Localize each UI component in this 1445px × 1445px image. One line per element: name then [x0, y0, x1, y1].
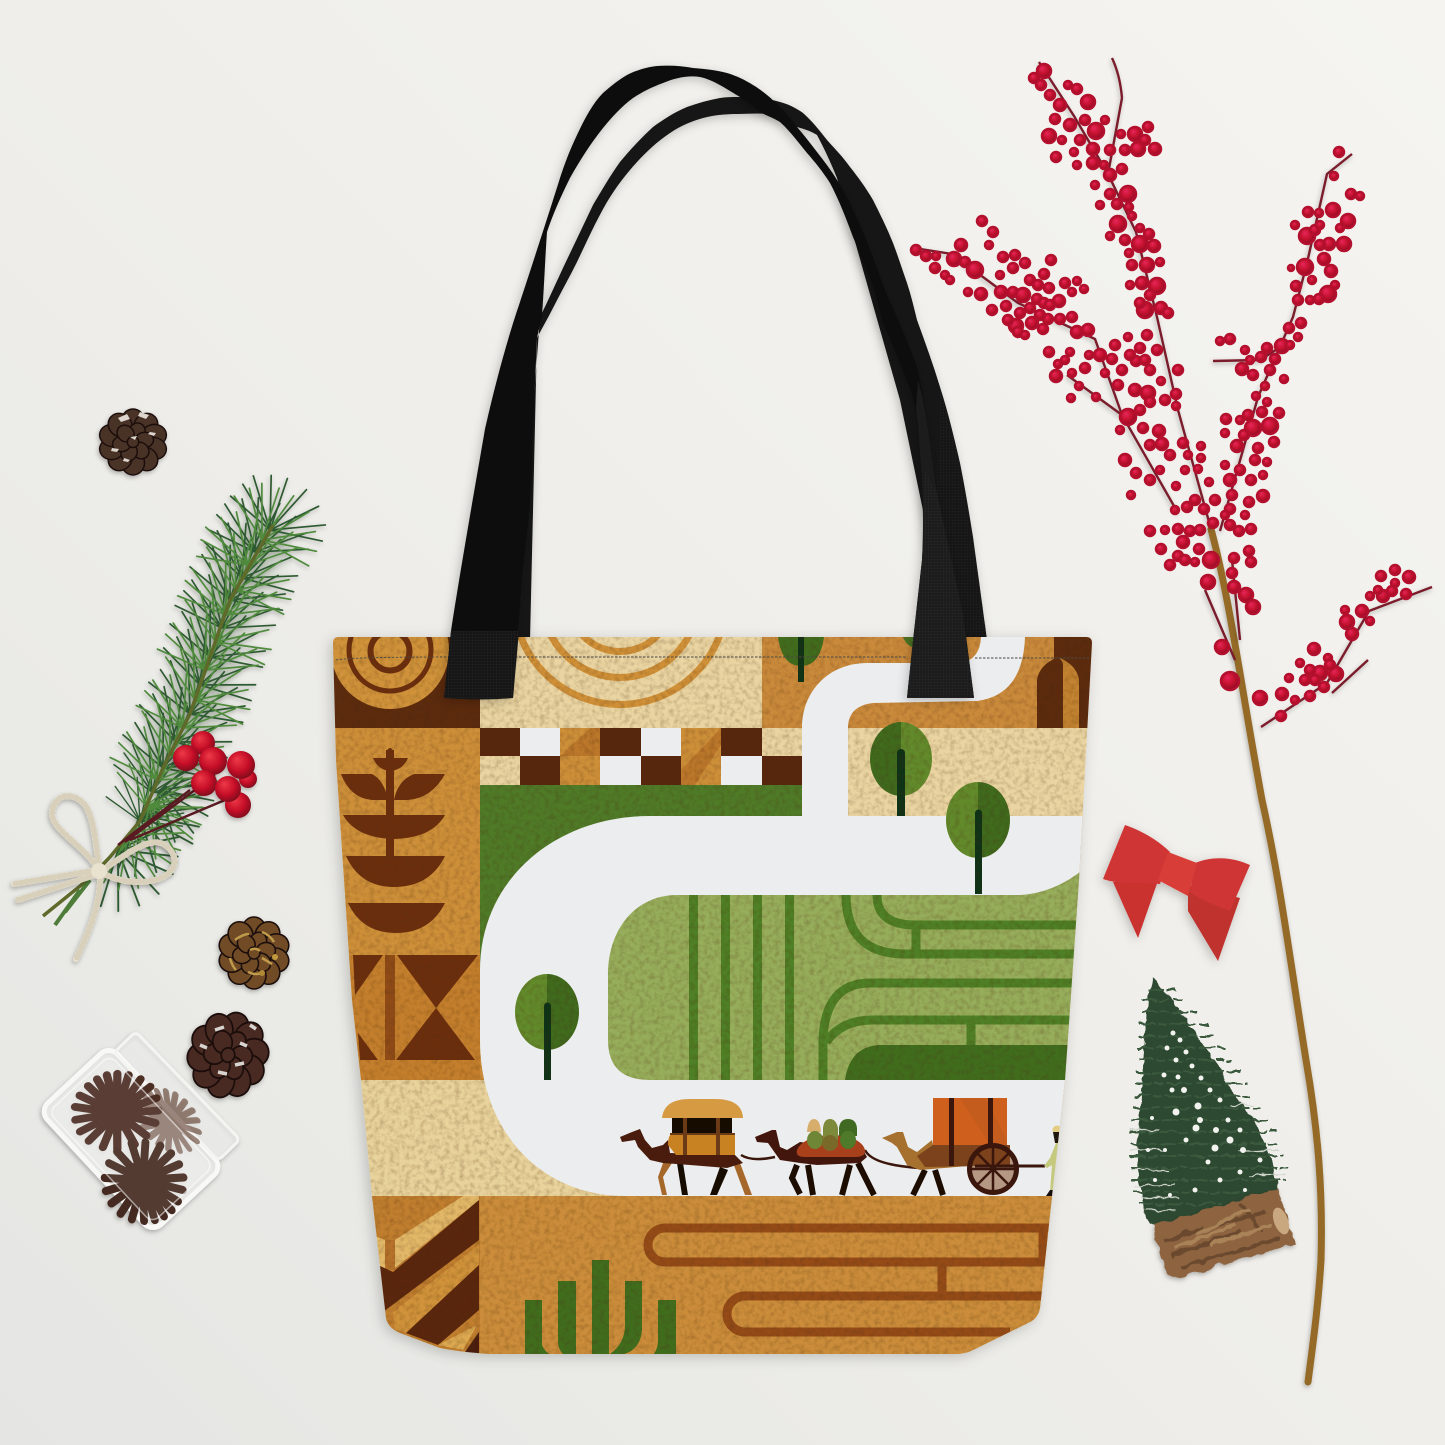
icon: tree 2 — [946, 782, 1010, 894]
snow flecks — [1146, 1030, 1262, 1197]
panel: cream block right — [848, 728, 1098, 816]
cart wheel — [970, 1146, 1016, 1192]
pine cone beside jar — [175, 1002, 281, 1108]
panel: triangle block — [349, 955, 480, 1080]
right strap lower section — [907, 380, 974, 698]
stitching — [336, 657, 1090, 660]
front strap — [444, 66, 987, 700]
berry cluster — [173, 731, 257, 818]
branch: red winterberry — [911, 58, 1432, 1382]
panel: checker strip — [480, 728, 802, 785]
pine density haze — [163, 545, 262, 768]
panel: light green field — [608, 868, 1085, 1080]
camel 2 — [755, 1119, 920, 1195]
pine sprig with berries and twine — [14, 460, 340, 959]
panel: coloured blocks — [324, 634, 1095, 1361]
berry stems — [118, 775, 225, 845]
dark green block — [845, 1045, 1085, 1080]
tote bag body — [324, 634, 1095, 1363]
pine cone 1 — [97, 409, 169, 475]
back strap — [516, 97, 987, 640]
panel: top-left brown block with rings — [334, 637, 480, 728]
road and white checker squares — [480, 637, 1100, 1196]
panel: cream rings block — [480, 637, 762, 728]
panel: chevron block — [372, 1196, 480, 1354]
maze lines — [648, 1228, 1060, 1332]
icon: tree 1 — [870, 722, 932, 816]
panel: leaf motif — [341, 748, 445, 933]
icon: tree 3 — [515, 974, 579, 1080]
red ribbon bow — [1103, 825, 1250, 961]
panel: cream block lower left — [361, 1080, 622, 1196]
camel 3 with cart — [882, 1098, 1045, 1195]
field lines — [694, 895, 1085, 1080]
pine needles — [89, 460, 340, 929]
pine cone 2 — [216, 917, 292, 989]
camel 1 — [620, 1099, 775, 1195]
wooden log base — [1153, 1189, 1295, 1279]
glass jar with cones — [39, 1032, 240, 1236]
panel: bottom orange block — [480, 1196, 1052, 1354]
stems: red twigs — [914, 58, 1432, 727]
berries — [911, 64, 1415, 721]
caravan leader — [1044, 1126, 1062, 1196]
twine bow — [14, 796, 175, 959]
icon: cactus — [525, 1260, 676, 1356]
glass sheen — [48, 1055, 214, 1223]
back strap weave — [937, 387, 987, 635]
jar body — [39, 1046, 223, 1232]
stem: main brown — [1211, 529, 1321, 1382]
panel: top-right orange block — [778, 637, 1092, 728]
second cone in jar — [90, 1128, 198, 1236]
mini bottle-brush tree — [1130, 976, 1295, 1279]
camel caravan — [620, 1098, 1062, 1196]
left strap tab — [444, 631, 519, 700]
sprig base leaves — [55, 880, 90, 925]
cone in jar — [66, 1064, 167, 1158]
sprig stem — [43, 525, 273, 916]
jar neck — [114, 1032, 240, 1160]
tree foliage — [1130, 976, 1288, 1232]
cone in jar neck — [126, 1078, 211, 1163]
panel: dark green field — [480, 785, 802, 968]
